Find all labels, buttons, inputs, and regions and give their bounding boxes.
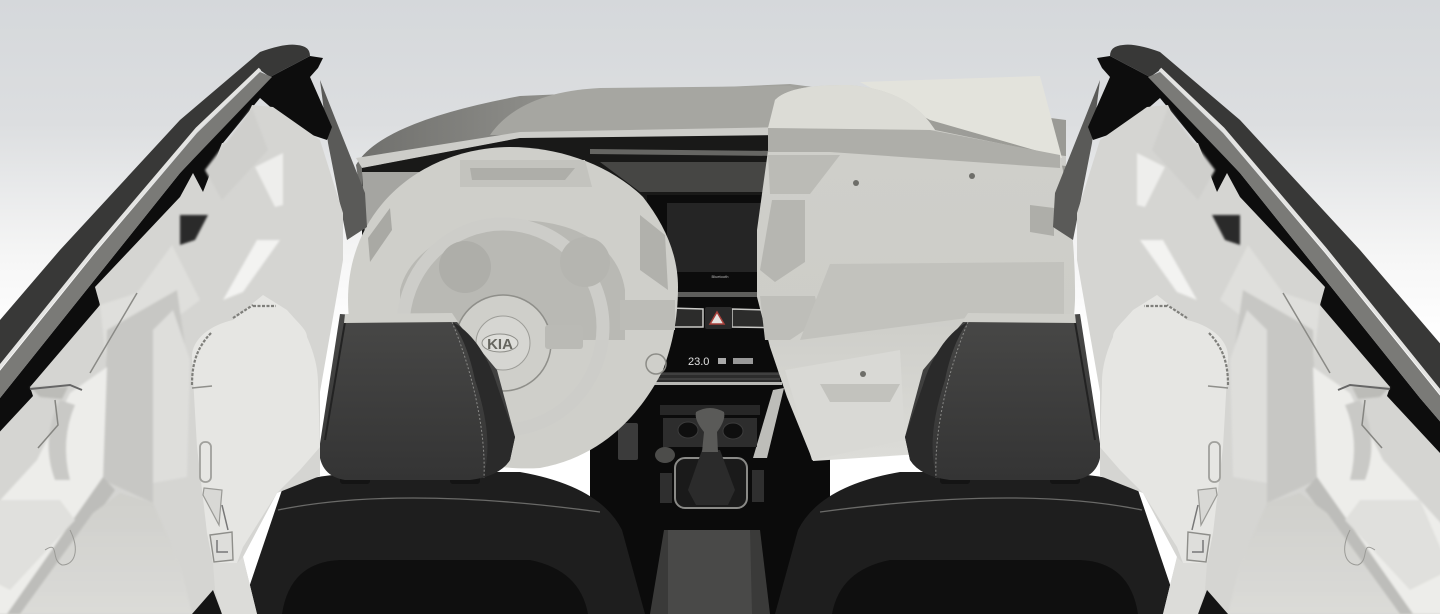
screen label: Bluetooth bbox=[712, 274, 728, 279]
driver airbag bbox=[348, 147, 678, 468]
gear console bbox=[618, 405, 770, 614]
windshield and dashboard top bbox=[356, 84, 1066, 300]
side curtain and side airbags: left bbox=[0, 45, 367, 614]
side curtain and side airbags: right bbox=[1053, 45, 1440, 614]
steering wheel hub bbox=[455, 295, 551, 391]
instrument gauges bbox=[439, 241, 491, 293]
infotainment screen bbox=[647, 195, 800, 297]
passenger airbag bbox=[757, 76, 1075, 461]
centre console dark interior bbox=[590, 162, 830, 614]
temperature readout: 23.0 bbox=[688, 356, 709, 368]
climate panel bbox=[650, 356, 784, 458]
wheel logo: KIA bbox=[487, 336, 513, 353]
left front seat bbox=[240, 313, 645, 614]
instrument shroud bbox=[400, 221, 625, 340]
steering wheel rim bbox=[403, 224, 603, 430]
right front seat bbox=[775, 313, 1180, 614]
wheel logo bbox=[482, 334, 518, 353]
air vents and hazard button bbox=[633, 307, 808, 329]
